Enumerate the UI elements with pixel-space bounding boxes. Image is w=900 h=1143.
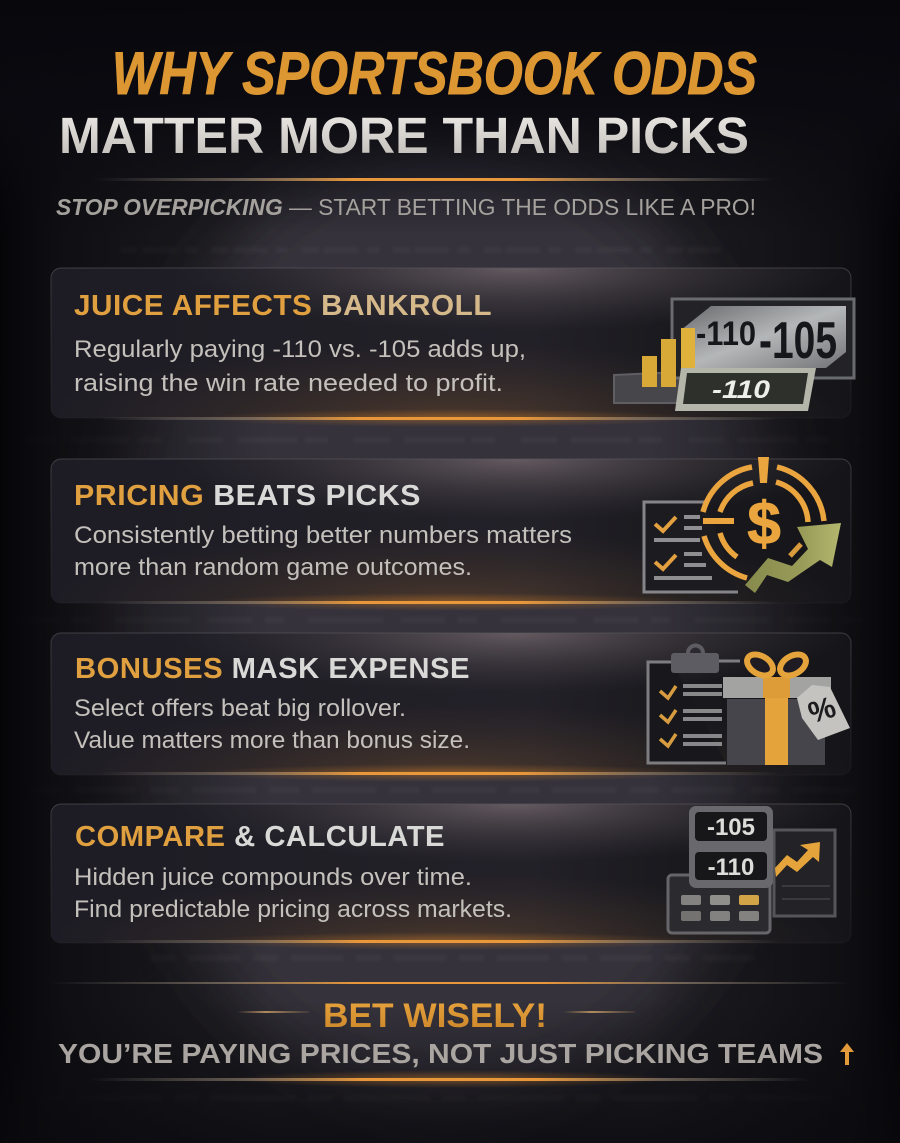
panel: juice affects bankroll [51, 268, 854, 427]
panel: compare and calculate [51, 804, 851, 950]
panel: juice affects bankroll: raising the win rate needed to profit. [74, 370, 503, 397]
panel: pricing beats picks [51, 457, 851, 611]
heading: PRICING BEATS PICKS [74, 480, 421, 512]
footer rule [90, 1070, 810, 1088]
icon: odds ticket and bars: -110 [712, 376, 770, 404]
icon: odds ticket and bars: -105 [759, 312, 837, 370]
panel: compare and calculate: Find predictable pricing across markets. [74, 896, 512, 923]
footer line: YOU’RE PAYING PRICES, NOT JUST PICKING TEAMS [58, 1038, 823, 1069]
title divider [95, 178, 775, 181]
subtitle: STOP OVERPICKING — START BETTING THE ODDS LIKE A PRO! [56, 194, 756, 220]
icon: checklist, dollar target and arrow [644, 457, 841, 593]
body text: Consistently betting better numbers matters [74, 522, 572, 549]
body text: Regularly paying -110 vs. -105 adds up, [74, 336, 526, 363]
call to action: BET WISELY! [323, 997, 547, 1035]
footer divider [50, 982, 850, 984]
heading: COMPARE & CALCULATE [75, 821, 445, 853]
body text: Hidden juice compounds over time. [74, 864, 472, 891]
icon: calculator with odds and chart: -105 [707, 814, 755, 841]
icon: calculator with odds and chart [668, 806, 835, 933]
body text: Select offers beat big rollover. [74, 695, 406, 722]
icon: clipboard and gift [648, 646, 850, 765]
icon: checklist, dollar target and arrow: $ [747, 490, 781, 557]
title line 2: MATTER MORE THAN PICKS [59, 107, 749, 164]
icon: up arrow [840, 1043, 854, 1065]
icon: odds ticket and bars: -110 [696, 315, 756, 353]
panel: pricing beats picks: more than random game outcomes. [74, 554, 472, 581]
panel: bonuses mask expense: Value matters more than bonus size. [74, 727, 470, 754]
heading: BONUSES MASK EXPENSE [75, 653, 470, 685]
panel: bonuses mask expense [51, 633, 851, 782]
title line 1: WHY SPORTSBOOK ODDS [112, 40, 757, 107]
icon: calculator with odds and chart: -110 [708, 854, 754, 881]
icon: odds ticket and bars [614, 299, 854, 411]
icon: clipboard and gift: % [804, 691, 840, 730]
heading: JUICE AFFECTS BANKROLL [74, 290, 492, 322]
